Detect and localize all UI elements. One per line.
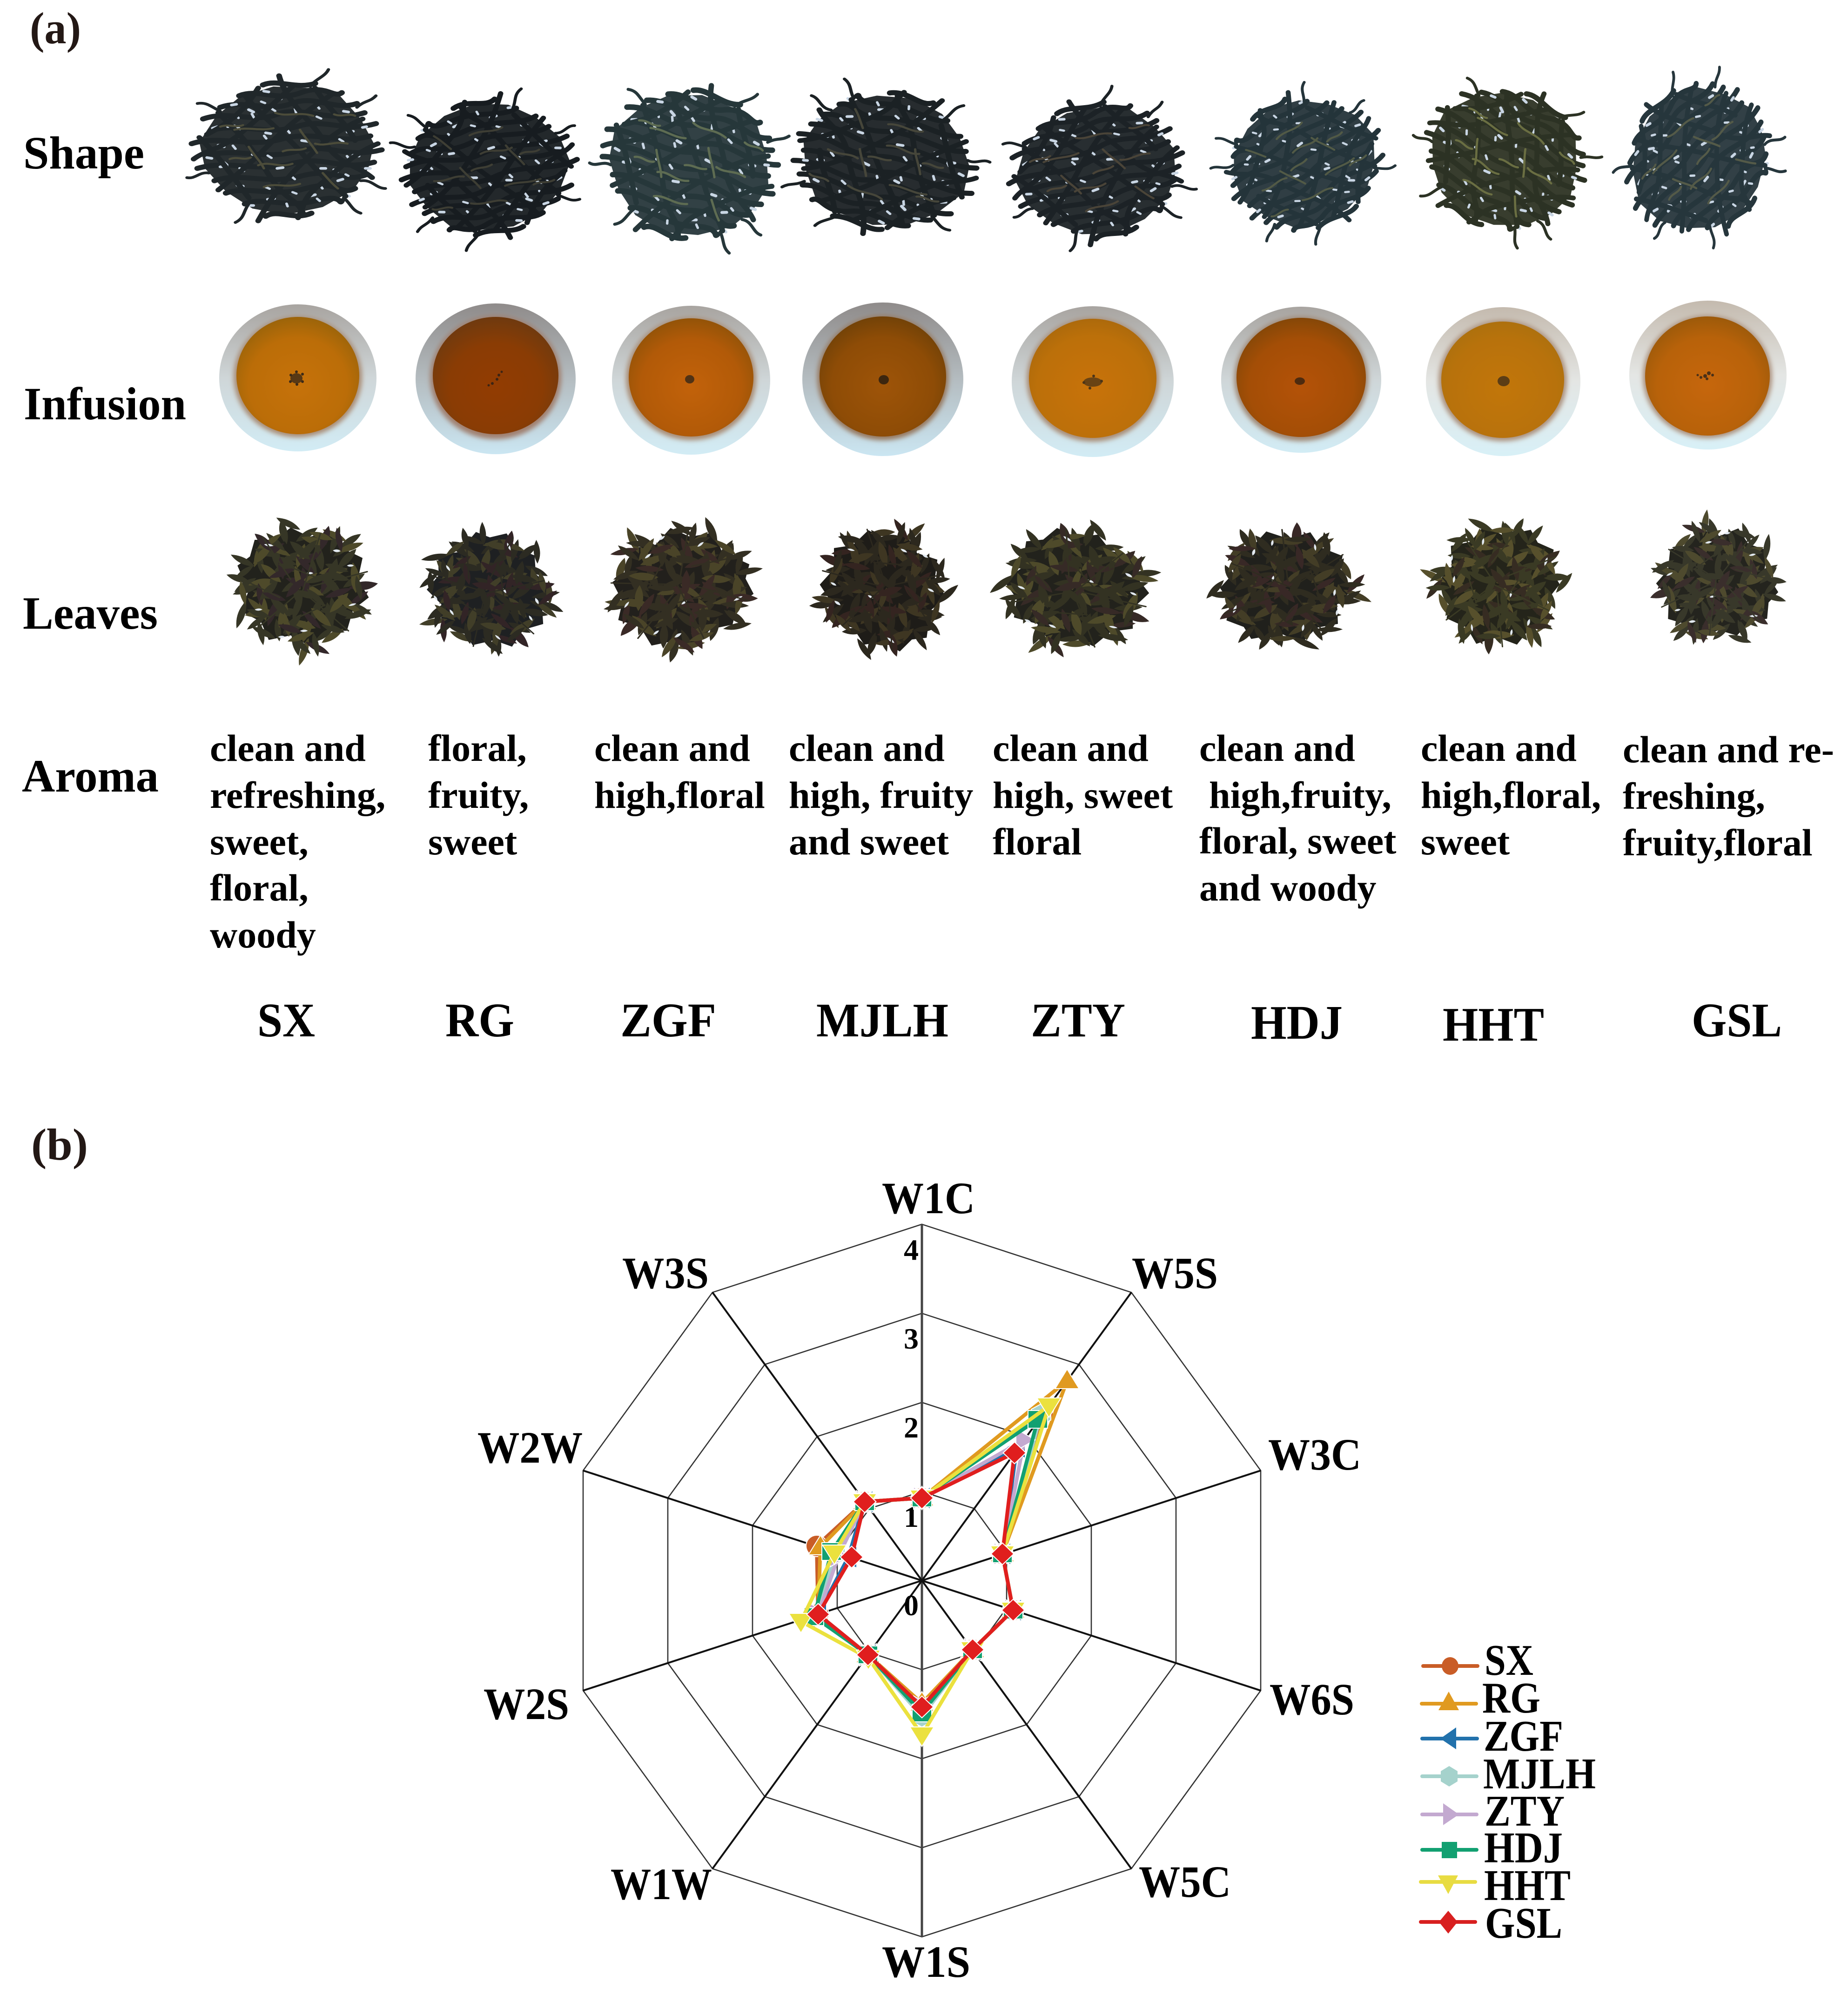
series: SX [806, 1403, 1053, 1717]
row of dry tea shape photos [187, 40, 1807, 275]
row of infused leaves photos [196, 449, 1829, 731]
axis tick numbers: 1 [904, 1500, 919, 1533]
aroma text: ZGF: clean and [594, 727, 750, 769]
sample names row [257, 994, 1782, 1051]
row heading: Infusion: Infusion [24, 378, 186, 430]
series: GSL [807, 1443, 1025, 1717]
dry tea: MJLH [762, 63, 1008, 266]
row of tea infusion cups [219, 301, 1787, 457]
aroma text: HDJ: high,fruity, [1209, 774, 1391, 816]
aroma text: HDJ: and woody [1199, 867, 1377, 909]
infused leaves: GSL [1606, 474, 1829, 698]
cup: ZGF [612, 306, 770, 455]
dry tea: ZTY [984, 75, 1206, 260]
cup: ZTY [1012, 306, 1174, 457]
row heading: Leaves: Leaves [23, 587, 158, 639]
aroma text: SX [210, 727, 385, 956]
legend item: HDJ: HDJ [1484, 1824, 1563, 1872]
aroma text: ZTY [993, 727, 1173, 863]
legend item: GSL: GSL [1485, 1899, 1562, 1948]
axis tick numbers: 2 [904, 1411, 919, 1444]
infused leaves: SX [196, 480, 408, 687]
legend item: RG: RG [1482, 1674, 1540, 1722]
aroma text: GSL: clean and re- [1623, 728, 1834, 771]
sample names row: ZTY [1031, 994, 1125, 1047]
aroma text: ZGF [594, 727, 765, 816]
legend item: ZGF [1422, 1712, 1563, 1760]
axis labels: W2S [484, 1679, 569, 1729]
aroma text: MJLH [789, 727, 973, 863]
row heading: Aroma: Aroma [22, 750, 159, 802]
aroma text: RG: sweet [428, 820, 517, 863]
legend item: GSL [1421, 1899, 1562, 1948]
aroma text: RG [428, 727, 529, 863]
legend item: ZTY [1422, 1787, 1565, 1835]
aroma text: ZTY: floral [993, 820, 1082, 863]
infused leaves: HDJ [1151, 481, 1415, 693]
axis labels: W5C [1139, 1857, 1231, 1907]
axis tick numbers [904, 1233, 919, 1622]
sample names row: RG [445, 994, 514, 1047]
aroma text: RG: floral, [428, 727, 527, 769]
axis labels: W6S [1270, 1674, 1354, 1724]
aroma text: MJLH: and sweet [789, 820, 949, 863]
legend item: HDJ [1422, 1824, 1563, 1872]
series: RG [807, 1370, 1078, 1711]
aroma text: RG: fruity, [428, 774, 529, 816]
row heading: Shape: Shape [23, 127, 144, 179]
dry tea: RG [383, 82, 596, 259]
sample names row: SX [257, 994, 315, 1047]
cup: MJLH [802, 302, 963, 456]
aroma text: ZTY: high, sweet [993, 774, 1173, 816]
axis tick numbers: 4 [904, 1233, 919, 1266]
sample names row: HDJ [1251, 996, 1343, 1049]
dry tea: HHT [1385, 45, 1625, 268]
series: HHT [790, 1398, 1060, 1746]
axis labels: W1C [882, 1173, 975, 1223]
aroma text: HHT: sweet [1421, 820, 1510, 863]
axis labels: W3C [1268, 1430, 1361, 1479]
aroma text: ZGF: high,floral [594, 774, 765, 816]
series: ZTY [810, 1430, 1034, 1717]
aroma text: SX: floral, [210, 867, 309, 909]
aroma text: SX: sweet, [210, 820, 309, 863]
legend item: SX: SX [1485, 1636, 1533, 1685]
axis labels [477, 1173, 1361, 1987]
axis tick numbers: 3 [904, 1322, 919, 1355]
legend item: HHT [1421, 1861, 1571, 1910]
legend item: RG [1422, 1674, 1540, 1722]
cup: HHT [1426, 307, 1580, 456]
aroma text: HDJ [1199, 727, 1396, 909]
aroma text: HHT: clean and [1421, 727, 1577, 769]
aroma text: GSL [1623, 728, 1834, 864]
legend item: MJLH [1422, 1750, 1596, 1798]
series: MJLH [805, 1404, 1050, 1726]
aroma text: MJLH: clean and [789, 727, 945, 769]
aroma text: ZTY: clean and [993, 727, 1149, 769]
axis labels: W2W [477, 1423, 583, 1472]
legend [1421, 1636, 1596, 1948]
aroma text: MJLH: high, fruity [789, 774, 973, 816]
panel label (b): (b) [31, 1120, 88, 1169]
series: ZGF [808, 1437, 1025, 1717]
aroma text: SX: woody [210, 914, 316, 956]
legend item: MJLH: MJLH [1483, 1750, 1596, 1798]
dry tea: ZGF [572, 51, 808, 270]
radar grid rings [583, 1224, 1261, 1937]
aroma text: GSL: fruity,floral [1623, 821, 1813, 864]
panel label (a): (a) [30, 3, 81, 53]
cup: GSL [1629, 301, 1787, 450]
aroma text: HDJ: clean and [1199, 727, 1355, 769]
axis labels: W1S [882, 1937, 970, 1987]
legend item: ZGF: ZGF [1484, 1712, 1563, 1760]
legend item: HHT: HHT [1484, 1861, 1571, 1910]
axis labels: W1W [611, 1859, 712, 1909]
cup: RG [416, 303, 576, 454]
axis labels: W5S [1132, 1248, 1218, 1298]
infused leaves: RG [351, 462, 632, 717]
legend item: ZTY: ZTY [1485, 1787, 1565, 1835]
dry tea: HDJ [1193, 63, 1421, 266]
aroma text: HHT: high,floral, [1421, 774, 1601, 816]
cup: HDJ [1221, 307, 1381, 453]
dry tea: SX [187, 69, 385, 222]
radar chart [477, 1173, 1361, 1987]
infused leaves: HHT [1380, 472, 1623, 699]
sample names row: GSL [1692, 994, 1782, 1047]
sample names row: MJLH [816, 994, 948, 1047]
dry tea: GSL [1585, 40, 1807, 275]
infused leaves: ZTY [919, 451, 1236, 721]
aroma text: SX: clean and [210, 727, 366, 769]
sample names row: ZGF [620, 994, 716, 1047]
radar axes [583, 1224, 1261, 1937]
axis labels: W3S [622, 1248, 709, 1298]
infused leaves: MJLH [744, 453, 1020, 730]
cup: SX [219, 304, 376, 451]
sample names row: HHT [1443, 998, 1544, 1051]
aroma text: GSL: freshing, [1623, 775, 1765, 817]
aroma text: HDJ: floral, sweet [1199, 819, 1396, 862]
series: HDJ [805, 1411, 1047, 1721]
legend item: SX [1423, 1636, 1533, 1685]
aroma text: HHT [1421, 727, 1601, 863]
infused leaves: ZGF [522, 449, 844, 731]
axis tick numbers: 0 [904, 1589, 919, 1622]
aroma text: SX: refreshing, [210, 774, 385, 816]
